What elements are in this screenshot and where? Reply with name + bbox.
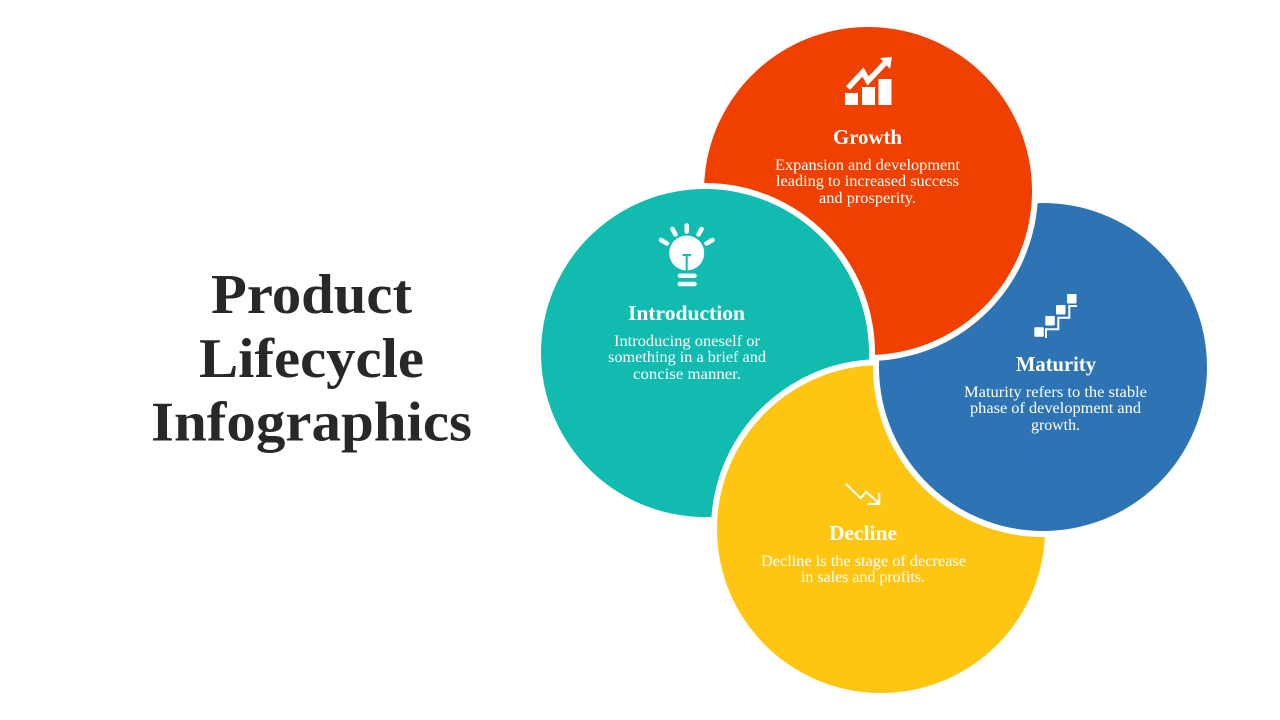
title: Lifecycle: [199, 328, 424, 390]
heading: growth: Growth: [833, 125, 902, 149]
text: introduction description: [608, 333, 766, 383]
heading: introduction: Introduction: [628, 301, 745, 325]
title: [151, 264, 472, 454]
text: growth description: Expansion and development: [775, 157, 961, 174]
icon: light bulb: [661, 226, 712, 284]
icon: stairs: [1034, 294, 1077, 338]
panel: introduction: [541, 189, 869, 517]
text: decline description: Decline is the stage of decrease: [761, 553, 966, 570]
text: growth description: leading to increased success: [776, 173, 959, 190]
icon: rising bar chart: [845, 57, 892, 105]
title: Product: [211, 264, 412, 326]
text: decline description: in sales and profits.: [801, 569, 925, 586]
text: maturity description: growth.: [1031, 417, 1080, 434]
text: maturity description: Maturity refers to the stable: [964, 384, 1147, 401]
text: growth description: [775, 157, 961, 207]
text: decline description: [761, 553, 966, 586]
icon: falling arrow: [846, 484, 879, 504]
panel: maturity: [879, 203, 1207, 531]
blue circle: [879, 203, 1207, 531]
panel: growth: [704, 27, 1032, 355]
title: Infographics: [151, 392, 472, 454]
text: introduction description: something in a brief and: [608, 349, 766, 366]
text: maturity description: phase of development and: [970, 400, 1141, 417]
teal circle: [541, 189, 869, 517]
text: introduction description: Introducing oneself or: [614, 333, 761, 350]
panel: decline: [717, 365, 1045, 693]
text: maturity description: [964, 384, 1147, 434]
orange circle: [704, 27, 1032, 355]
heading: maturity: Maturity: [1016, 352, 1096, 376]
yellow circle: [717, 365, 1045, 693]
text: introduction description: concise manner.: [633, 366, 741, 383]
text: growth description: and prosperity.: [819, 190, 916, 207]
heading: decline: Decline: [829, 521, 897, 545]
